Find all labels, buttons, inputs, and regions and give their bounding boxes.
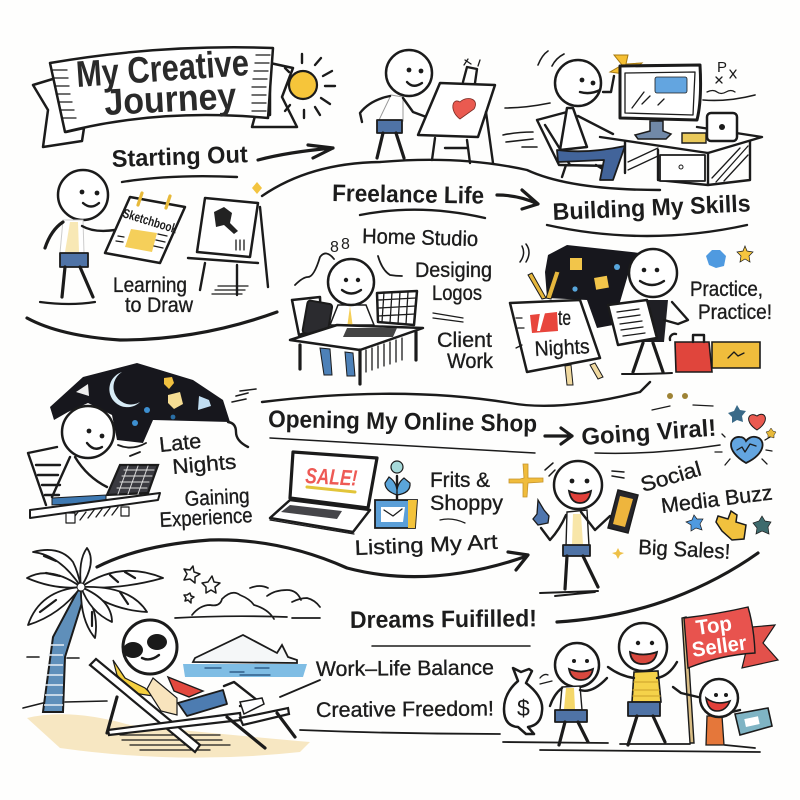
desk xyxy=(600,127,762,153)
title banner xyxy=(33,42,297,147)
chair xyxy=(28,447,60,505)
label: big sales: Big Sales! xyxy=(638,536,731,564)
chair xyxy=(537,319,539,321)
figure: freelancer at desk xyxy=(290,236,423,384)
label: home studio: Home Studio xyxy=(362,225,478,251)
label: late nights: Late xyxy=(158,430,202,457)
label: social media buzz: Social xyxy=(638,458,704,497)
label: fruits shoppy: Shoppy xyxy=(430,492,504,515)
label: creative freedom: Creative Freedom! xyxy=(316,697,494,722)
figure: relaxing in deck chair xyxy=(90,620,295,752)
scarf and shirt xyxy=(113,660,153,696)
night sky panel with late nights sign xyxy=(510,244,640,385)
laptop sale xyxy=(270,452,377,534)
arrow: starting out xyxy=(258,145,333,160)
camera xyxy=(707,113,737,141)
icon: small easel xyxy=(188,182,268,295)
heading: Building My Skills: Building My Skills xyxy=(552,190,751,226)
title text line 1: My Creative xyxy=(75,42,250,95)
icons: decorative stars xyxy=(184,566,220,603)
title text line 2: Journey xyxy=(103,75,238,123)
heading: dreams fulfilled: Dreams Fuifilled! xyxy=(350,605,537,634)
cloud outline xyxy=(175,586,320,619)
torso xyxy=(560,108,587,150)
figure: late-night laptop xyxy=(28,406,160,523)
label: designing logos: Logos xyxy=(432,282,482,305)
shadow xyxy=(120,735,230,750)
figure: going viral xyxy=(509,461,638,596)
label: designing logos: Desiging xyxy=(415,259,492,282)
icon: thumb and stars xyxy=(612,511,771,559)
late nights sky xyxy=(50,363,248,447)
label: fruits shoppy xyxy=(430,469,504,523)
icon: sketchbook xyxy=(105,193,185,263)
label: social media buzz: Media Buzz xyxy=(660,481,774,518)
monitor xyxy=(620,65,701,120)
icon: sketchbook: Sketchbook xyxy=(121,206,180,236)
grid screen xyxy=(377,291,417,325)
desk xyxy=(290,325,423,350)
heading: Starting Out: Starting Out xyxy=(111,141,248,173)
journey curve 1 xyxy=(262,160,660,196)
figure: man at desktop computer xyxy=(503,51,762,320)
label: client work xyxy=(437,329,493,373)
heading: going viral: Going Viral! xyxy=(581,415,717,451)
label: gaining experience: Gaining xyxy=(184,485,250,511)
icon: plant and envelope xyxy=(375,461,417,528)
brush curve right xyxy=(557,553,758,622)
label: client work: Work xyxy=(447,350,493,373)
head xyxy=(123,620,177,674)
label: social media buzz xyxy=(638,458,774,518)
figure: painter with easel xyxy=(360,50,495,163)
figure: practising with document xyxy=(608,249,760,374)
sparkle labels: P xyxy=(717,59,727,76)
middle figure xyxy=(619,623,667,671)
figure: freelancer at desk: 8 xyxy=(330,239,339,256)
arrow: freelance xyxy=(497,190,538,209)
label: learning to draw: to Draw xyxy=(125,294,194,317)
swoosh xyxy=(27,312,277,340)
night sky panel with late nights sign: Nights xyxy=(534,335,590,361)
easel xyxy=(418,83,495,137)
label: gaining experience: Experience xyxy=(159,504,253,532)
figure: small with shopping bag xyxy=(673,679,772,745)
phone xyxy=(608,490,638,533)
icons: viral sparks xyxy=(652,393,776,465)
left figure xyxy=(555,643,599,687)
flag top seller: Top xyxy=(694,612,733,640)
label: designing logos xyxy=(415,259,492,322)
label: client work: Client xyxy=(437,329,492,352)
icon: sun xyxy=(285,54,335,118)
night sky panel with late nights sign: te xyxy=(558,307,571,330)
label: learning to draw: Learning xyxy=(113,274,187,297)
label: learning to draw xyxy=(113,274,194,317)
beach xyxy=(27,714,310,758)
label: late nights xyxy=(158,430,237,479)
figure: starting out with sketchbook xyxy=(40,170,115,304)
label: practice xyxy=(690,278,772,324)
icon: money bag xyxy=(504,668,552,734)
flag top seller: Seller xyxy=(690,632,748,662)
monitor xyxy=(292,297,321,335)
torso xyxy=(330,305,374,325)
laptop sale: SALE! xyxy=(305,463,358,491)
fronds xyxy=(33,550,81,587)
swoosh xyxy=(262,382,650,406)
label: practice: Practice, xyxy=(690,278,763,301)
label: fruits shoppy: Frits & xyxy=(430,469,490,492)
heading: Freelance Life: Freelance Life xyxy=(332,180,484,210)
ground lines xyxy=(503,742,760,752)
label: listing my art: Listing My Art xyxy=(354,531,498,560)
laptop xyxy=(107,465,158,495)
figure: freelancer at desk: 8 xyxy=(341,236,350,253)
heading: opening shop: Opening My Online Shop xyxy=(268,406,537,438)
star xyxy=(610,55,642,87)
flag top seller xyxy=(682,607,778,743)
arrow: shop xyxy=(545,428,572,444)
icons: practice sparks xyxy=(706,246,753,268)
sign board xyxy=(510,300,600,372)
label: practice: Practice! xyxy=(698,301,772,324)
figures: group celebrating xyxy=(550,623,677,745)
long arrow curve xyxy=(97,540,528,577)
label: work life: Work–Life Balance xyxy=(316,656,494,681)
chair frame xyxy=(90,659,200,752)
island xyxy=(183,635,307,677)
label: late nights: Nights xyxy=(171,450,237,479)
motion lines xyxy=(503,51,755,147)
palm tree xyxy=(23,548,163,712)
suitcases xyxy=(675,342,712,372)
label: gaining experience xyxy=(159,485,253,532)
icon: money bag: $ xyxy=(517,695,530,721)
